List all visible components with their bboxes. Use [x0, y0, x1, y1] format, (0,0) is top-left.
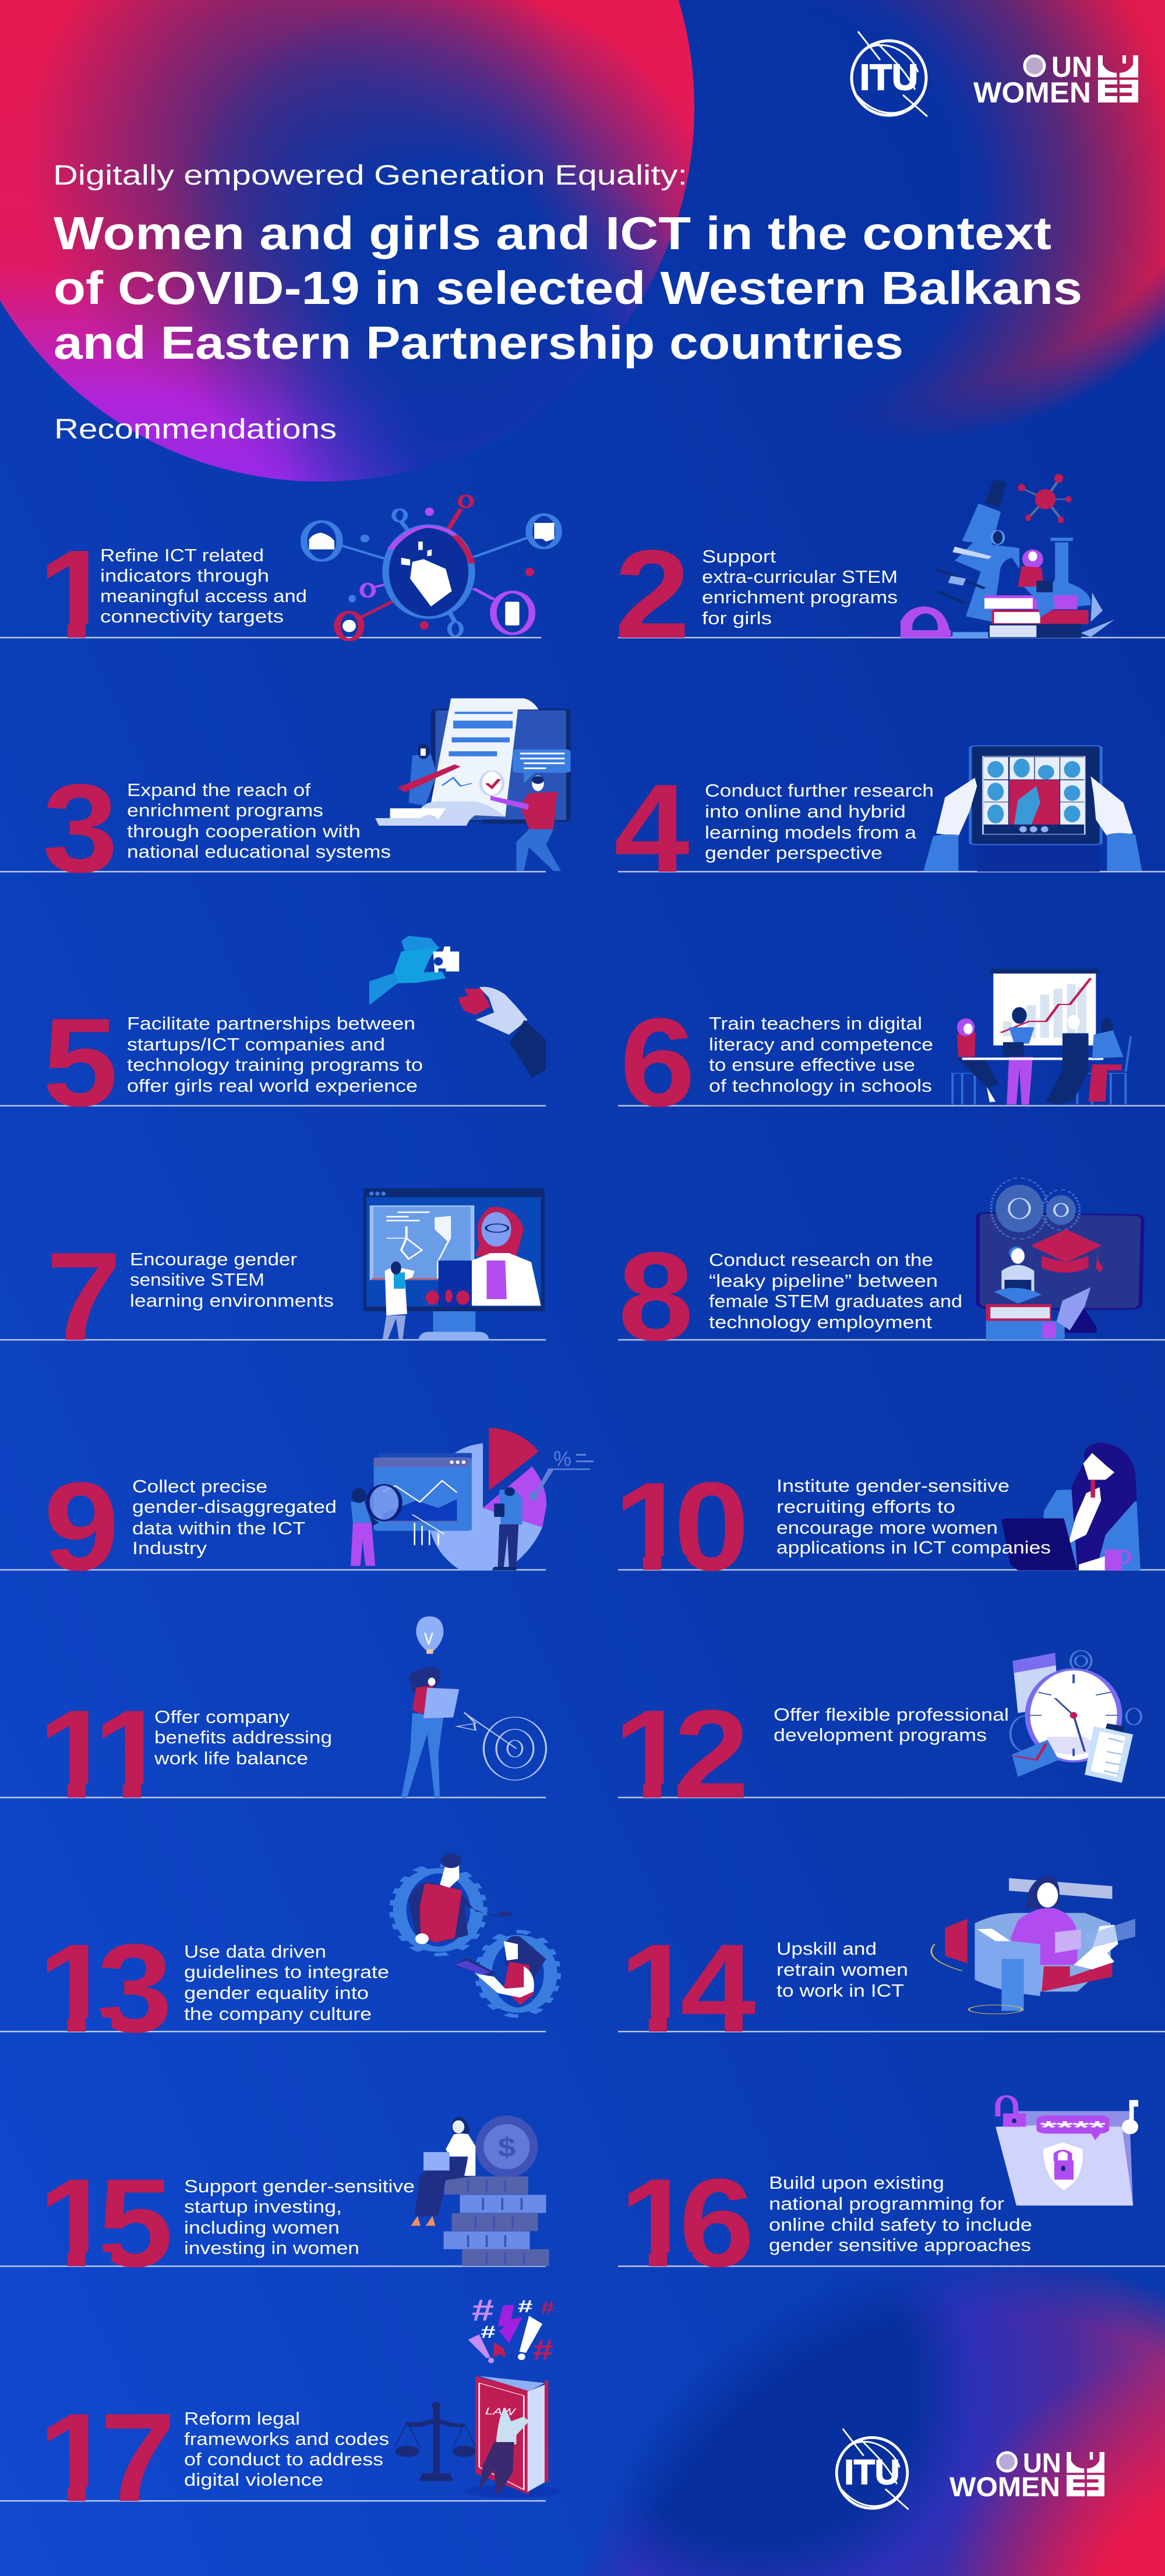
recommendation 12: [618, 1650, 1165, 1798]
icon: robot and human hands with puzzle pieces: [369, 936, 546, 1078]
recommendation 17: [0, 2294, 561, 2528]
icon: businesswoman with laptop: [1001, 1443, 1141, 1570]
text 13: guidelines to integrate: [184, 1962, 389, 1982]
numeral 8: 8: [618, 1226, 694, 1367]
text 16: [769, 2172, 1032, 2255]
text 9: Collect precise: [132, 1476, 267, 1496]
text 17: [184, 2408, 389, 2490]
logo: ITU top: ITU: [860, 58, 918, 98]
recommendation 14: [618, 1876, 1165, 2058]
text 8: technology employment: [709, 1312, 932, 1332]
icon: microscope, books and scientist: [901, 474, 1114, 638]
text 1: connectivity targets: [100, 606, 284, 627]
text 11: [154, 1707, 332, 1768]
recommendation 9: [0, 1428, 594, 1597]
text 9: [132, 1476, 337, 1558]
numeral 12: 12: [613, 1683, 749, 1824]
text 3: Expand the reach of: [127, 780, 310, 800]
logo: UN Women bottom: [949, 2447, 1104, 2502]
recommendation 16: [618, 2096, 1165, 2293]
text 15: including women: [184, 2217, 340, 2238]
text 6: [709, 1013, 933, 1096]
text 2: Support: [702, 546, 776, 567]
numeral 1: 1: [38, 523, 114, 664]
subtitle: Digitally empowered Generation Equality:: [53, 160, 687, 191]
top-right gradient blob: [849, 0, 1165, 433]
text 5: offer girls real world experience: [127, 1075, 418, 1096]
text 10: [776, 1475, 1051, 1558]
numeral 16: 16: [619, 2152, 754, 2293]
logo: ITU bottom: ITU: [844, 2454, 900, 2492]
text 14: retrain women: [776, 1959, 908, 1980]
text 17: digital violence: [184, 2469, 323, 2490]
icon: data analysis chart: [351, 1428, 594, 1570]
numeral 4: 4: [614, 758, 690, 898]
text 15: startup investing,: [184, 2196, 342, 2217]
section heading: Recommendations: Recommendations: [54, 414, 337, 445]
icon: clock, calendar and checklist: [1011, 1651, 1141, 1783]
bottom-right gradient blob: [591, 2263, 1165, 2576]
text 5: [127, 1013, 423, 1096]
text 17: of conduct to address: [184, 2449, 383, 2469]
text 4: Conduct further research: [705, 780, 934, 801]
text 6: to ensure effective use: [709, 1055, 915, 1075]
text 6: of technology in schools: [709, 1075, 932, 1096]
icon: law book, scales and symbols: #: [541, 2298, 555, 2317]
title: and Eastern Partnership countries: [54, 317, 903, 369]
text 16: Build upon existing: [769, 2172, 944, 2193]
numeral 15: 15: [38, 2152, 173, 2293]
text 7: learning environments: [130, 1290, 334, 1311]
text 4: learning models from a: [705, 822, 917, 843]
logo: UN Women top: [973, 51, 1138, 109]
text 4: [705, 780, 934, 863]
recommendation 15: [0, 2115, 549, 2293]
numeral 3: 3: [43, 758, 118, 898]
text 3: enrichment programs: [127, 800, 323, 820]
numeral 7: 7: [46, 1226, 122, 1367]
text 1: [100, 545, 307, 627]
numeral 14: 14: [619, 1917, 756, 2058]
logo: ITU bottom: [836, 2429, 909, 2510]
numeral 6: 6: [620, 992, 696, 1133]
text 14: [776, 1938, 908, 2001]
text 15: investing in women: [184, 2238, 359, 2258]
recommendation 13: [0, 1854, 556, 2058]
logo: UN Women bottom: WOMEN: [949, 2471, 1060, 2502]
text 6: Train teachers in digital: [709, 1013, 922, 1034]
icon: women on gears: [394, 1854, 556, 2016]
text 7: [130, 1249, 334, 1311]
text 2: [702, 546, 898, 628]
text 8: female STEM graduates and: [709, 1291, 962, 1311]
icon: meeting with presentation chart: [952, 969, 1131, 1105]
text 11: work life balance: [154, 1748, 308, 1768]
text 6: literacy and competence: [709, 1034, 933, 1055]
numeral 17: 17: [38, 2387, 176, 2528]
text 1: indicators through: [100, 565, 269, 586]
text 16: gender sensitive approaches: [769, 2235, 1031, 2255]
recommendation 4: [614, 746, 1165, 898]
text 14: Upskill and: [776, 1938, 877, 1959]
title: Women and girls and ICT in the context: [54, 207, 1051, 259]
text 5: Facilitate partnerships between: [127, 1013, 415, 1034]
recommendation 3: [0, 698, 571, 898]
text 12: Offer flexible professional: [774, 1704, 1009, 1725]
numeral 9: 9: [44, 1456, 119, 1597]
icon: contract signing: [375, 698, 571, 871]
text 16: national programming for: [769, 2193, 1004, 2214]
icon: law book, scales and symbols: #: [472, 2294, 494, 2327]
logo: ITU top: [852, 31, 927, 116]
title: of COVID-19 in selected Western Balkans: [54, 262, 1082, 314]
numeral 5: 5: [43, 992, 118, 1133]
icon: data analysis chart: %: [553, 1447, 571, 1470]
text 3: through cooperation with: [127, 821, 361, 841]
numeral 13: 13: [38, 1917, 172, 2058]
text 13: Use data driven: [184, 1941, 326, 1962]
icon: law book, scales and symbols: #: [533, 2335, 553, 2366]
icon: digital network hand: [304, 496, 559, 640]
text 2: extra-curricular STEM: [702, 567, 898, 587]
text 13: gender equality into: [184, 1983, 369, 2003]
recommendation 1: [0, 494, 562, 642]
numeral 11: 11: [38, 1683, 169, 1824]
icon: secure folder with password: [995, 2096, 1138, 2206]
text 15: [184, 2176, 415, 2258]
logo: UN Women top: WOMEN: [973, 76, 1091, 109]
top-left gradient blob: [0, 0, 694, 482]
text 7: Encourage gender: [130, 1249, 297, 1269]
numeral 2: 2: [615, 523, 690, 664]
text 8: [709, 1250, 962, 1332]
text 13: [184, 1941, 389, 2024]
recommendation 7: [0, 1188, 546, 1367]
text 7: sensitive STEM: [130, 1269, 264, 1290]
text 15: Support gender-sensitive: [184, 2176, 415, 2196]
recommendation 5: [0, 936, 546, 1133]
text 9: gender-disaggregated: [132, 1496, 337, 1517]
logo: UN Women top: UN: [1051, 51, 1092, 83]
text 1: meaningful access and: [100, 586, 307, 606]
text 4: into online and hybrid: [705, 801, 906, 822]
icon: law book, scales and symbols: #: [481, 2322, 496, 2342]
text 11: Offer company: [154, 1707, 290, 1727]
icon: law book, scales and symbols: LAW: [483, 2406, 517, 2418]
text 5: technology training programs to: [127, 1055, 423, 1075]
icon: law book, scales and symbols: #: [518, 2297, 533, 2316]
icon: woman on stack of coins: $: [498, 2132, 516, 2163]
icon: tablet with video call: [923, 746, 1142, 872]
text 10: encourage more women: [776, 1517, 998, 1538]
text 8: “leaky pipeline” between: [709, 1271, 938, 1291]
text 8: Conduct research on the: [709, 1250, 933, 1270]
icon: woman in data hologram: [931, 1876, 1135, 2014]
numeral 10: 10: [613, 1456, 749, 1597]
text 9: Industry: [132, 1538, 207, 1558]
text 14: to work in ICT: [776, 1980, 904, 2001]
recommendation 6: [618, 969, 1165, 1133]
text 2: enrichment programs: [702, 587, 898, 607]
text 12: development programs: [774, 1725, 987, 1745]
recommendation 8: [618, 1178, 1165, 1367]
icon: woman on stack of coins: [411, 2115, 549, 2266]
text 16: online child safety to include: [769, 2214, 1032, 2235]
text 17: Reform legal: [184, 2408, 300, 2429]
text 4: gender perspective: [705, 843, 882, 863]
text 5: startups/ICT companies and: [127, 1034, 385, 1055]
icon: online science lecture on monitor: [363, 1188, 545, 1340]
icon: secure folder with password: ****: [1040, 2117, 1106, 2137]
text 2: for girls: [702, 608, 772, 628]
recommendation 10: [618, 1443, 1165, 1571]
text 9: data within the ICT: [132, 1518, 305, 1538]
text 1: Refine ICT related: [100, 545, 264, 565]
text 3: [127, 780, 391, 862]
text 3: national educational systems: [127, 841, 391, 862]
text 10: applications in ICT companies: [776, 1537, 1051, 1558]
text 13: the company culture: [184, 2004, 372, 2024]
text 17: frameworks and codes: [184, 2429, 389, 2449]
icon: woman with idea and target: [401, 1616, 546, 1797]
icon: law book, scales and symbols: [396, 2294, 561, 2498]
recommendation 2: [615, 474, 1165, 664]
icon: graduate at monitor with gears: [978, 1178, 1143, 1340]
text 11: benefits addressing: [154, 1727, 332, 1747]
logo: UN Women bottom: UN: [1023, 2447, 1061, 2478]
text 12: [774, 1704, 1009, 1745]
text 10: Institute gender-sensitive: [776, 1475, 1009, 1496]
title: [54, 207, 1082, 369]
text 10: recruiting efforts to: [776, 1496, 955, 1517]
recommendation 11: [0, 1616, 548, 1798]
